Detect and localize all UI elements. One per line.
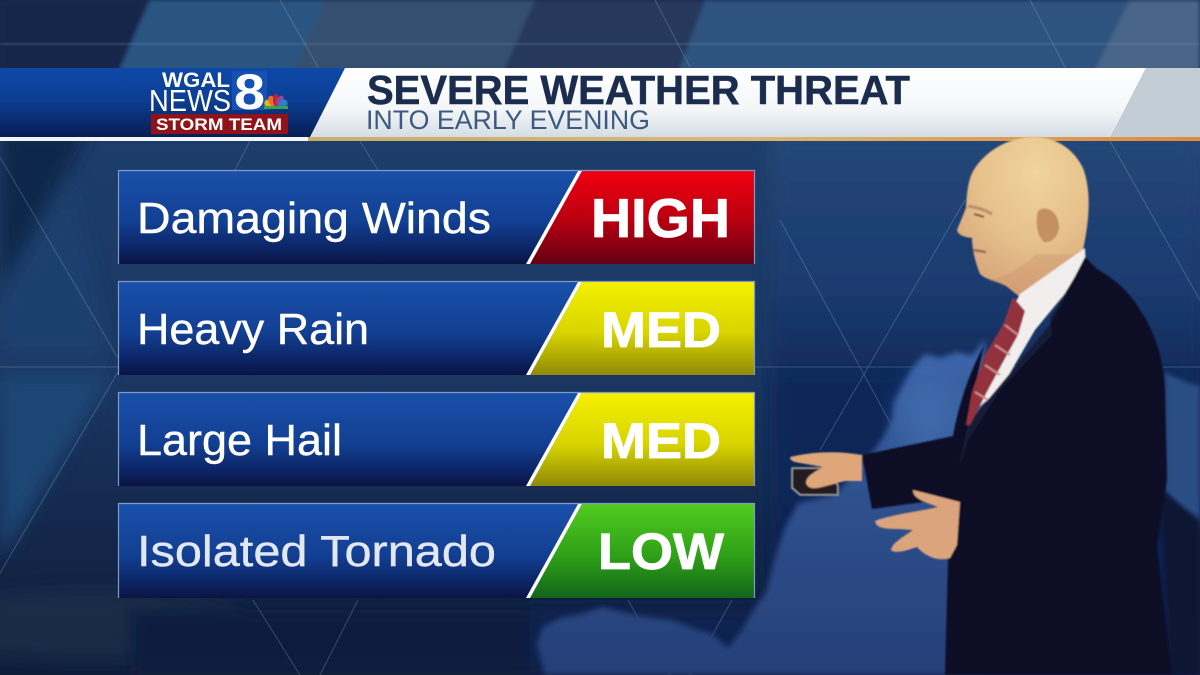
rating: med: MED xyxy=(601,302,721,358)
logo: WGAL News 8 Storm Team: NEWS xyxy=(149,83,231,118)
gesturing hand xyxy=(875,490,960,559)
cloud xyxy=(537,340,1200,675)
soft backdrop xyxy=(0,141,800,675)
label: damaging winds: Damaging Winds xyxy=(137,194,491,243)
subtitle: INTO EARLY EVENING xyxy=(366,105,650,135)
tie xyxy=(966,297,1025,425)
remote clicker xyxy=(792,465,845,495)
label: large hail: Large Hail xyxy=(137,416,342,465)
header white title panel xyxy=(310,68,1146,137)
header banner xyxy=(0,64,1200,141)
logo: WGAL News 8 Storm Team: WGAL xyxy=(162,69,230,92)
suit jacket xyxy=(862,257,1172,675)
panel: threat row large hail xyxy=(118,392,754,486)
pointing hand xyxy=(789,451,864,482)
header grey end panel xyxy=(1111,68,1200,137)
face features xyxy=(968,206,1075,297)
ear xyxy=(1037,209,1059,242)
panel: threat row damaging winds xyxy=(118,170,754,264)
rating: high: HIGH xyxy=(591,187,730,249)
label: heavy rain: Heavy Rain xyxy=(137,305,369,354)
logo: WGAL News 8 Storm Team xyxy=(151,71,288,134)
shirt collar xyxy=(975,248,1086,410)
rating: med: MED xyxy=(601,413,721,469)
rating: low: LOW xyxy=(598,523,725,580)
panel: threat row isolated tornado xyxy=(118,504,754,598)
presenter xyxy=(790,137,1172,675)
icon: peacock xyxy=(264,94,288,109)
lapel xyxy=(959,269,1081,465)
title: SEVERE WEATHER THREAT xyxy=(367,67,910,113)
panel: threat row heavy rain xyxy=(118,282,754,375)
header blue logo panel xyxy=(0,68,345,137)
head xyxy=(957,137,1089,297)
label: isolated tornado: Isolated Tornado xyxy=(137,527,496,576)
top facets xyxy=(118,0,1200,80)
logo: WGAL News 8 Storm Team: 8 xyxy=(234,64,265,120)
storm team tag: STORM TEAM xyxy=(156,115,282,134)
